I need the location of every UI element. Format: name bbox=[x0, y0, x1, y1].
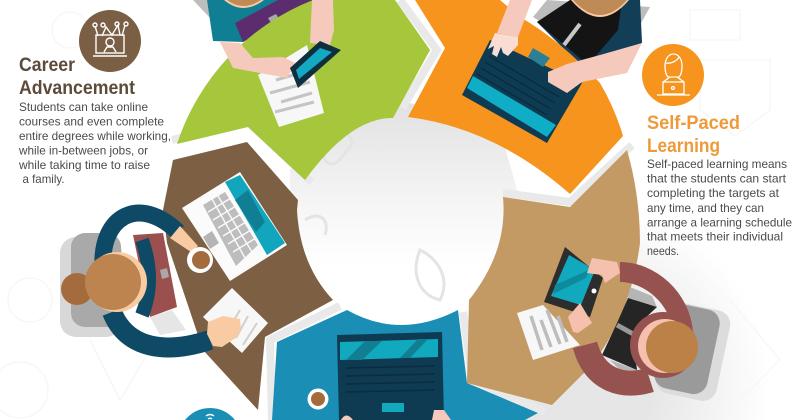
coffee cup, brown desk bbox=[187, 247, 213, 273]
text: career advancement: courses and even complete bbox=[19, 114, 164, 128]
text: self-paced learning: Self-paced learning means bbox=[647, 157, 787, 171]
text: self-paced learning: arrange a learning schedule bbox=[647, 216, 792, 230]
paper and hand, brown desk bbox=[203, 288, 268, 353]
text: self-paced learning: completing the targets at bbox=[647, 186, 780, 200]
person left bbox=[60, 213, 210, 347]
text: self-paced learning bbox=[647, 157, 792, 258]
text: career advancement: entire degrees while working, bbox=[19, 129, 171, 143]
segment: green bbox=[177, 0, 430, 180]
text: career advancement: while taking time to raise bbox=[18, 158, 150, 172]
icon: self-paced learning bbox=[642, 44, 704, 106]
person top-left: chair and body bbox=[193, 0, 320, 42]
text: career advancement: while in-between jobs, or bbox=[18, 144, 148, 158]
center area bbox=[290, 100, 520, 330]
text: career advancement: Students can take online bbox=[19, 100, 148, 114]
laptop on blue desk bbox=[337, 332, 451, 420]
icon: wifi, bottom bbox=[185, 408, 235, 420]
text: self-paced learning: that meets their individual bbox=[647, 230, 783, 244]
person top-right: laptop and arms bbox=[462, 0, 642, 143]
segment: tan bbox=[467, 150, 640, 405]
person bottom-right bbox=[517, 247, 733, 403]
heading: career advancement: Career bbox=[19, 54, 75, 76]
segment: orange bbox=[408, 0, 623, 194]
text: career advancement: a family. bbox=[22, 172, 64, 186]
icon: career advancement bbox=[79, 10, 141, 72]
person top-right: body bbox=[533, 0, 650, 65]
coffee cup, blue desk bbox=[308, 388, 328, 410]
heading: career advancement bbox=[19, 54, 135, 99]
heading: self-paced learning: Self-Paced bbox=[647, 112, 740, 134]
segment shadow bands bbox=[172, 0, 632, 420]
text: self-paced learning: that the students can start bbox=[647, 172, 787, 186]
segment: brown bbox=[163, 142, 333, 410]
segment: blue bbox=[272, 310, 538, 420]
heading: self-paced learning bbox=[647, 112, 740, 157]
text: self-paced learning: any time, and they can bbox=[647, 201, 764, 215]
laptop on brown desk bbox=[182, 172, 287, 281]
heading: career advancement: Advancement bbox=[19, 77, 135, 99]
text: self-paced learning: needs. bbox=[647, 244, 679, 258]
heading: self-paced learning: Learning bbox=[647, 135, 720, 157]
text: career advancement bbox=[18, 100, 171, 186]
person top-left: arms, paper and tablet bbox=[220, 0, 341, 127]
